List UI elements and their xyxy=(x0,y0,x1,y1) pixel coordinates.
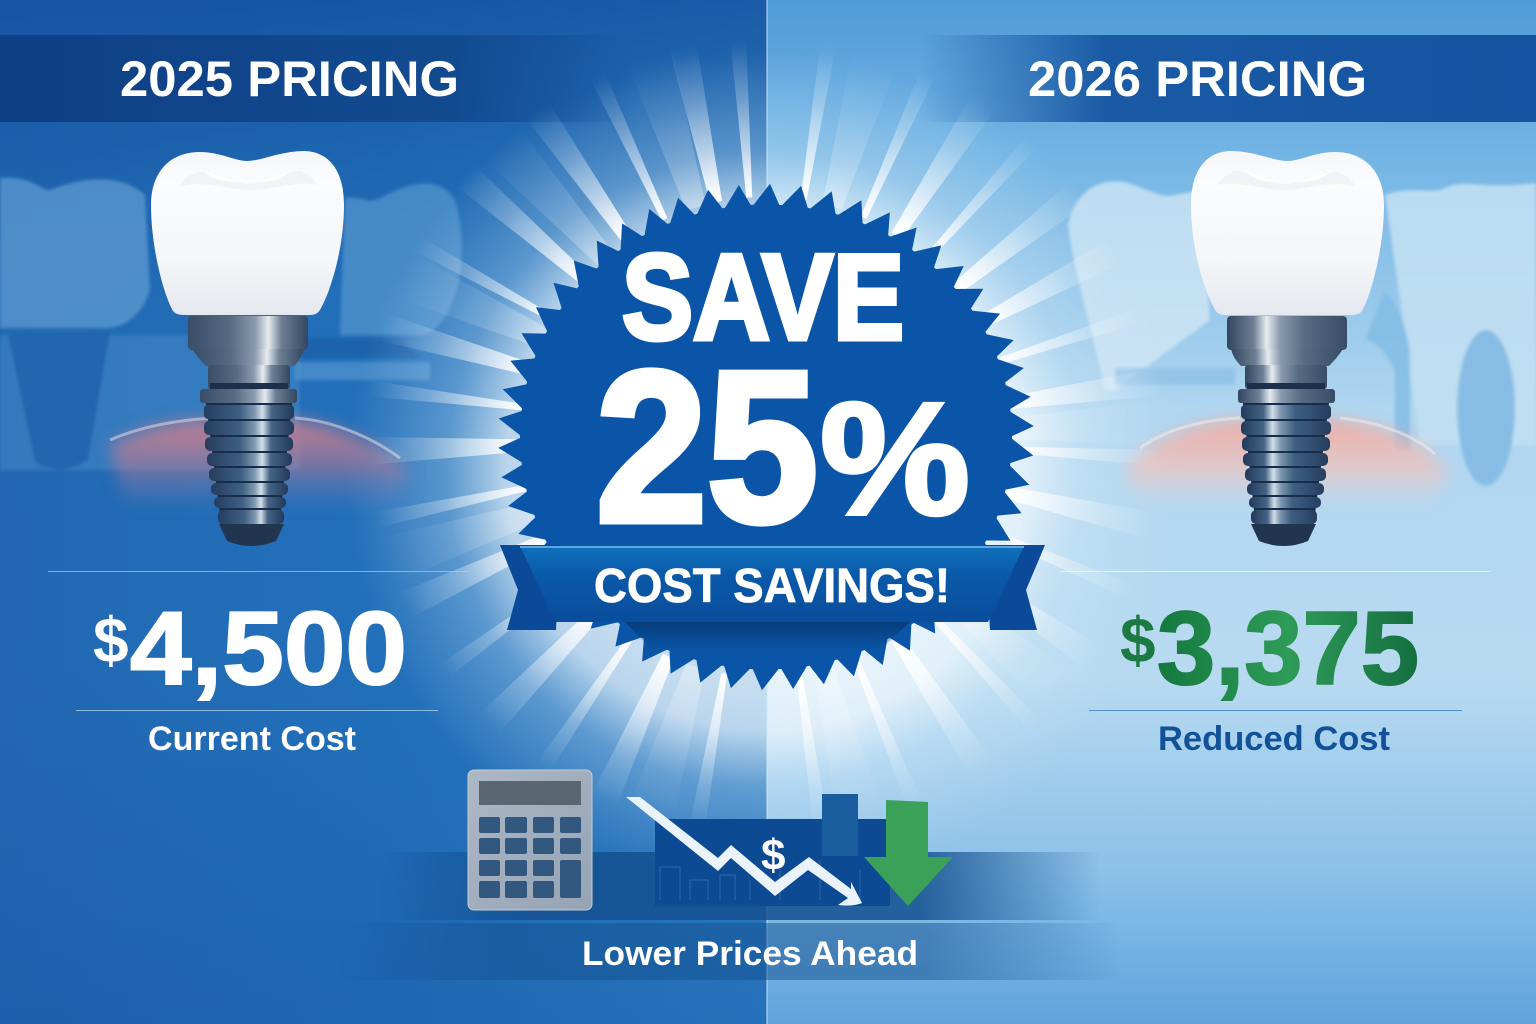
implant left xyxy=(151,151,344,546)
SAVE text: SAVE xyxy=(622,229,904,365)
icon: calculator xyxy=(468,770,592,910)
header band: 2025 xyxy=(0,35,630,122)
background: left panel vertical shading xyxy=(0,0,767,1024)
bottom caption band xyxy=(340,923,1120,980)
label current cost: Current Cost xyxy=(148,720,356,758)
faint teeth left xyxy=(0,178,462,470)
heading: 2025 pricing: 2025 PRICING xyxy=(120,51,459,107)
percent sign: % xyxy=(820,369,970,548)
starburst badge xyxy=(498,184,1034,690)
green down arrow xyxy=(864,800,953,906)
bottom band xyxy=(380,852,1100,920)
sunburst rays xyxy=(366,37,1167,834)
dollar sign left: $ xyxy=(93,604,129,676)
background: right panel xyxy=(767,0,1536,1024)
icon: falling price chart xyxy=(626,794,953,906)
bar xyxy=(822,794,858,856)
white falling arrow xyxy=(626,797,862,906)
heading: 2026 pricing: 2026 PRICING xyxy=(1028,51,1367,107)
price 4,500: 4,500 xyxy=(130,591,407,707)
gum left xyxy=(110,418,410,505)
left price block xyxy=(48,571,468,758)
right price block xyxy=(1060,571,1490,758)
dollar symbol: $ xyxy=(761,831,785,880)
ribbon label: COST SAVINGS! xyxy=(594,560,950,613)
label reduced cost: Reduced Cost xyxy=(1158,720,1390,758)
caption: lower prices ahead: Lower Prices Ahead xyxy=(582,935,918,973)
gum right xyxy=(1125,418,1448,505)
implant right xyxy=(1191,151,1384,546)
central glow xyxy=(346,50,1186,890)
price 3,375: 3,375 xyxy=(1157,591,1419,707)
ribbon banner xyxy=(500,545,1045,650)
background: left panel xyxy=(0,0,767,1024)
divider xyxy=(766,0,768,1024)
faint teeth right xyxy=(1068,181,1536,486)
dollar sign right: $ xyxy=(1120,604,1156,676)
25 text: 25 xyxy=(596,326,818,567)
header band: 2026 xyxy=(920,35,1536,122)
